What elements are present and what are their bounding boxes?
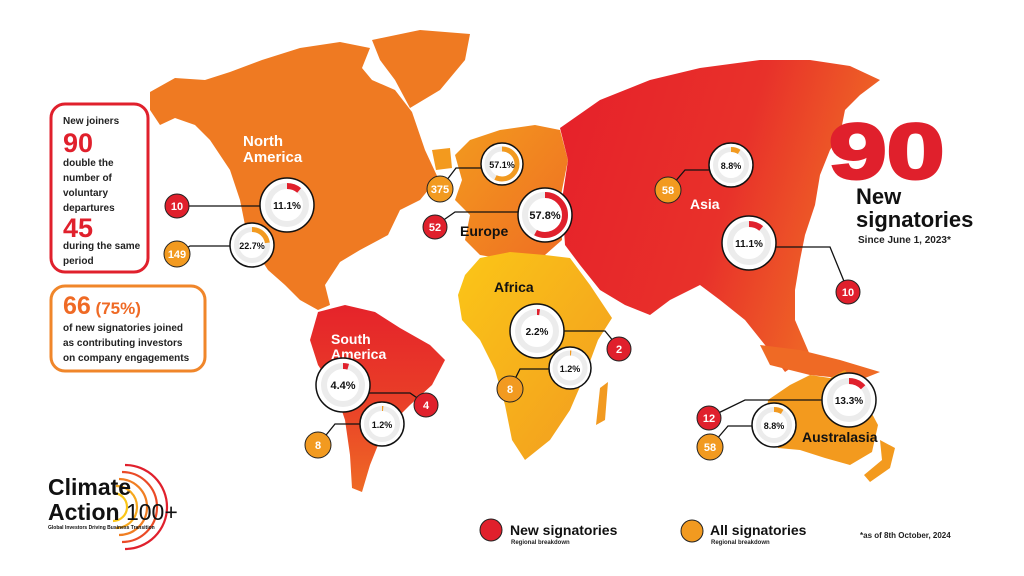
legend: new signatories [480, 519, 618, 546]
region labels: Asia [690, 196, 720, 212]
donut: SA all 1.2%: 1.2% [372, 420, 392, 430]
footnote: *as of 8th October, 2024 [860, 531, 951, 540]
donut: SA all 1.2% [360, 402, 404, 446]
region labels: Europe [460, 223, 508, 239]
headline: 90 new signatories: Since June 1, 2023* [858, 235, 951, 246]
panel: new joiners box: departures [63, 203, 115, 214]
donut: Europe all 57.1%: 57.1% [489, 160, 515, 170]
headline: 90 new signatories: 90 [829, 108, 944, 195]
donut: Asia new 11.1% [722, 216, 776, 270]
legend: new signatories: New signatories [510, 522, 618, 538]
legend: all signatories: Regional breakdown [711, 540, 770, 546]
count badges: 4 [423, 400, 430, 412]
count badges: 58 [662, 185, 674, 197]
donut: NA all 22.7%: 22.7% [239, 241, 265, 251]
legend: all signatories [681, 520, 807, 546]
count badges: 10 [171, 201, 183, 213]
donut: SA new 4.4% [316, 358, 370, 412]
headline: 90 new signatories: New [856, 184, 902, 209]
panel: new joiners box [51, 104, 148, 272]
panel: new joiners box: during the same [63, 241, 141, 252]
count badges: 8 [507, 384, 513, 396]
donut: Australasia new 13.3%: 13.3% [835, 396, 863, 407]
logo: Climate Action 100+ [48, 465, 178, 549]
count badges: 149 [168, 249, 186, 261]
donut: SA new 4.4%: 4.4% [330, 380, 356, 392]
region labels: America [331, 346, 386, 362]
panel: new joiners box: New joiners [63, 116, 120, 127]
logo: Climate Action 100+: Climate [48, 474, 131, 500]
panel: new joiners box: 90 [63, 128, 93, 158]
region labels [243, 133, 878, 445]
map: south america [310, 305, 445, 492]
headline: 90 new signatories: signatories [856, 207, 973, 232]
legend: new signatories: Regional breakdown [511, 540, 570, 546]
map: asia [560, 60, 880, 380]
region labels: North [243, 133, 283, 150]
count badges: 375 [431, 184, 449, 196]
panel: new joiners box: double the [63, 158, 114, 169]
donut: Asia all 8.8% [709, 143, 753, 187]
map: europe [432, 125, 568, 260]
map: africa [458, 252, 612, 460]
donut: Africa new 2.2% [510, 304, 564, 358]
donut: Africa all 1.2% [549, 347, 591, 389]
count badges [164, 176, 860, 460]
map: north america [150, 30, 470, 310]
donut charts [230, 143, 876, 447]
count badges: 8 [315, 440, 321, 452]
donut: Europe all 57.1% [481, 143, 523, 185]
donut: NA all 22.7% [230, 223, 274, 267]
panel: 66 (75%) box: on company engagements [63, 353, 190, 364]
count badges: 10 [842, 287, 854, 299]
donut: Asia new 11.1%: 11.1% [735, 239, 763, 250]
donut: Australasia all 8.8%: 8.8% [764, 421, 784, 431]
region labels: South [331, 331, 371, 347]
donut: Australasia all 8.8% [752, 403, 796, 447]
logo: Climate Action 100+: Action 100+ [48, 499, 178, 525]
panel: new joiners box: period [63, 256, 94, 267]
panel: new joiners box: number of [63, 173, 113, 184]
region labels: America [243, 149, 303, 166]
map: australasia [765, 370, 895, 482]
panel: 66 (75%) box: as contributing investors [63, 338, 183, 349]
panel: new joiners box: 45 [63, 213, 93, 243]
count badges: 52 [429, 222, 441, 234]
donut: Europe new 57.8%: 57.8% [529, 210, 561, 222]
donut: NA new 11.1%: 11.1% [273, 201, 301, 212]
region labels: Africa [494, 279, 534, 295]
donut: Europe new 57.8% [518, 188, 572, 242]
donut: NA new 11.1% [260, 178, 314, 232]
region labels: Australasia [802, 429, 878, 445]
panel: 66 (75%) box [51, 286, 205, 371]
legend: all signatories: All signatories [710, 522, 807, 538]
donut: Asia all 8.8%: 8.8% [721, 161, 741, 171]
panel: 66 (75%) box: 66 (75%) [63, 292, 141, 320]
donut: Australasia new 13.3% [822, 373, 876, 427]
panel: new joiners box: voluntary [63, 188, 108, 199]
donut: Africa all 1.2%: 1.2% [560, 364, 580, 374]
count badges: 12 [703, 413, 715, 425]
count badges: 2 [616, 344, 622, 356]
headline: 90 new signatories [829, 108, 973, 246]
donut: Africa new 2.2%: 2.2% [526, 327, 549, 338]
count badges: 58 [704, 442, 716, 454]
logo: Climate Action 100+: Global Investors Driving Business Transition [48, 525, 155, 531]
panel: 66 (75%) box: of new signatories joined [63, 323, 183, 334]
connector lines [177, 168, 848, 447]
